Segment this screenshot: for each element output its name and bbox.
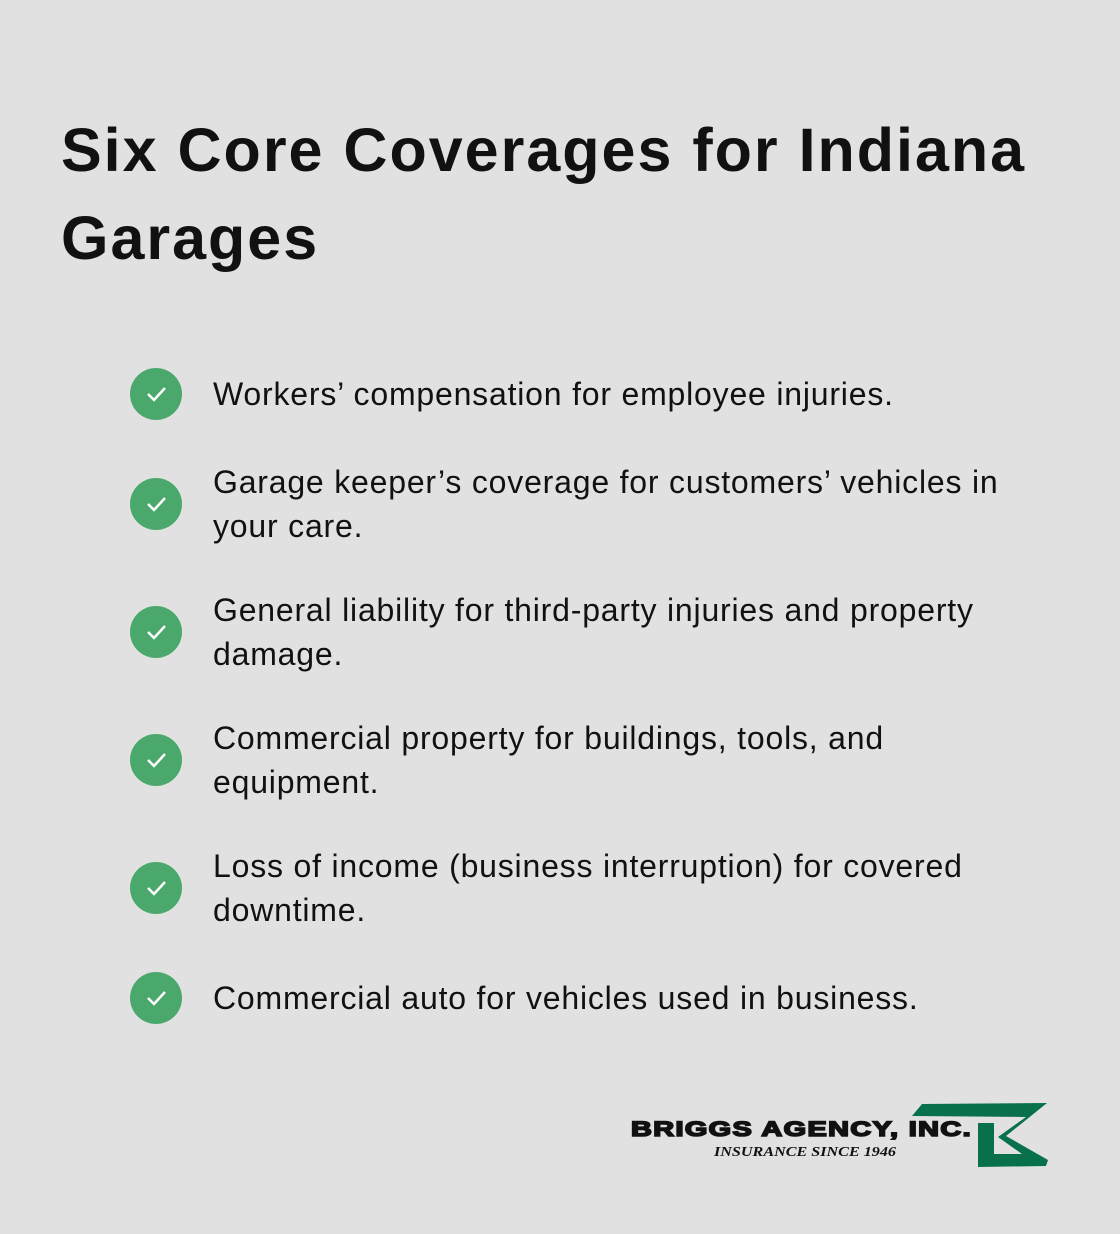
text: your care.: [213, 508, 363, 544]
text: damage.: [213, 636, 343, 672]
item 2: [130, 464, 998, 544]
icon: check: [130, 734, 182, 786]
text: Commercial property for buildings, tools, and: [213, 720, 884, 756]
logo name: BRIGGS AGENCY, INC.: [631, 1118, 972, 1141]
text: Workers’ compensation for employee injuries.: [213, 376, 894, 412]
text: Commercial auto for vehicles used in business.: [213, 980, 919, 1016]
text: downtime.: [213, 892, 366, 928]
title: [61, 116, 1026, 272]
icon: check: [130, 972, 182, 1024]
text: Loss of income (business interruption) for covered: [213, 848, 963, 884]
text: [213, 464, 998, 544]
item 6: [130, 972, 919, 1024]
icon: check: [130, 862, 182, 914]
text: equipment.: [213, 764, 379, 800]
title: Garages: [61, 204, 319, 272]
icon: check: [130, 368, 182, 420]
text: Garage keeper’s coverage for customers’ vehicles in: [213, 464, 998, 500]
logo mark: [912, 1103, 1048, 1167]
logo tagline: INSURANCE SINCE 1946: [713, 1145, 896, 1160]
text: [213, 592, 974, 672]
icon: check: [130, 478, 182, 530]
item 5: [130, 848, 963, 928]
text: [213, 720, 884, 800]
text: General liability for third-party injuries and property: [213, 592, 974, 628]
icon: check: [130, 606, 182, 658]
item 1: [130, 368, 894, 420]
title: Six Core Coverages for Indiana: [61, 116, 1026, 184]
item 4: [130, 720, 884, 800]
item 3: [130, 592, 974, 672]
text: [213, 848, 963, 928]
